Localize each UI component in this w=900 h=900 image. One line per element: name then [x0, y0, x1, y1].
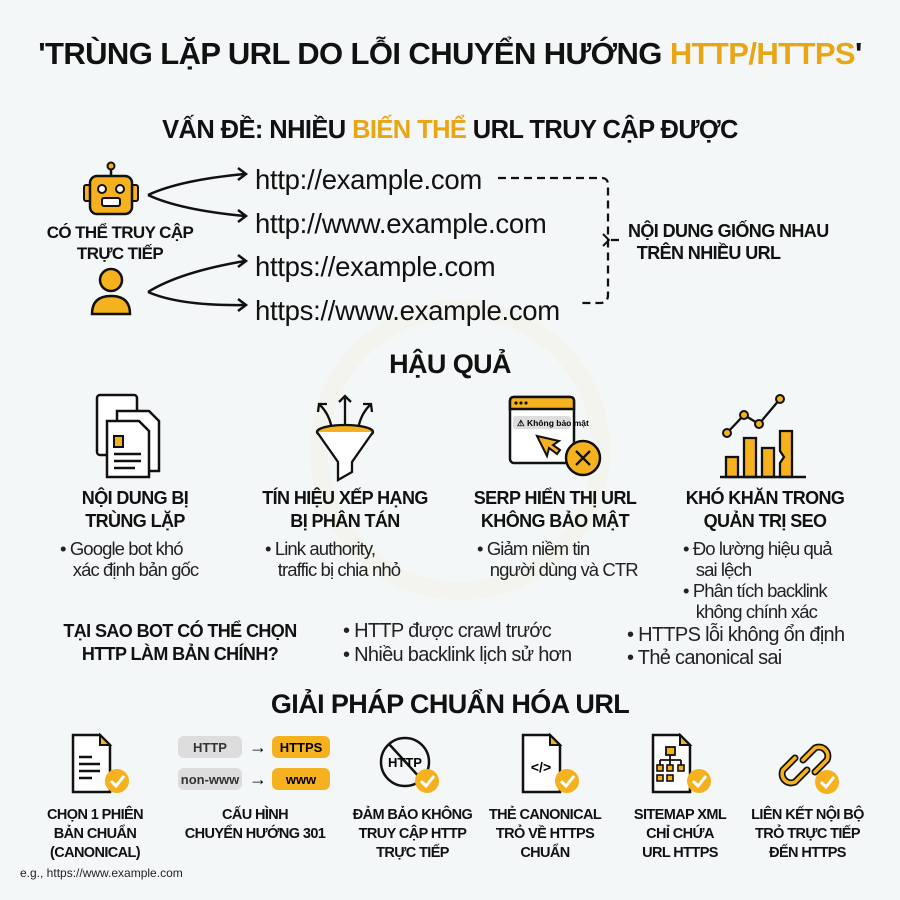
label: CHỈ CHỨA	[646, 826, 714, 842]
label	[47, 806, 143, 861]
solution 1	[47, 732, 143, 861]
heading: consequences: HẬU QUẢ	[389, 349, 511, 379]
icon: redirect boxes: →	[249, 769, 267, 789]
icon: no http	[380, 736, 439, 793]
url list: https://example.com	[255, 251, 495, 282]
solution 2	[178, 736, 330, 842]
label: (CANONICAL)	[50, 845, 140, 861]
icon: redirect boxes: www	[285, 772, 317, 787]
title: NỘI DUNG BỊ	[82, 488, 188, 508]
label: direct access	[47, 223, 194, 263]
label: direct access: TRỰC TIẾP	[77, 244, 163, 263]
icon: chart	[720, 394, 806, 478]
bullets: • Giảm niềm tin	[477, 538, 589, 559]
bullets: • Phân tích backlink	[683, 580, 827, 601]
bullets: sai lệch	[696, 559, 751, 580]
bullets: • Google bot khó	[60, 538, 183, 559]
label: CHỌN 1 PHIÊN	[47, 807, 143, 823]
title: TÍN HIỆU XẾP HẠNG	[262, 488, 428, 508]
title	[82, 487, 188, 531]
reasons list 2: • Thẻ canonical sai	[627, 647, 782, 669]
label: CHUYỂN HƯỚNG 301	[185, 826, 325, 842]
label	[610, 806, 750, 863]
label: TRỰC TIẾP	[376, 845, 449, 861]
reasons list 1	[343, 620, 571, 666]
bullets	[683, 538, 833, 622]
subheading: problem: VẤN ĐỀ: NHIỀU BIẾN THỂ URL TRUY CẬP ĐƯỢC	[162, 116, 738, 144]
url list: https://www.example.com	[255, 294, 560, 326]
reasons list 1: • Nhiều backlink lịch sử hơn	[343, 644, 571, 666]
bullets	[265, 538, 400, 580]
title: KHÓ KHĂN TRONG	[686, 488, 844, 508]
solution 4	[489, 732, 602, 861]
label: ĐẢM BẢO KHÔNG	[353, 807, 472, 823]
label: BẢN CHUẨN	[54, 826, 136, 842]
title	[686, 487, 844, 531]
label: ĐẾN HTTPS	[769, 845, 846, 861]
icon: redirect boxes: non-www	[181, 772, 240, 787]
icon: redirect boxes	[178, 736, 330, 790]
label: same content: TRÊN NHIỀU URL	[637, 243, 780, 263]
url list: http://example.com	[255, 164, 482, 195]
panel: ranking signals	[262, 394, 428, 580]
title: QUẢN TRỊ SEO	[704, 511, 826, 531]
solution 3	[352, 736, 472, 861]
label: THẺ CANONICAL	[489, 807, 601, 823]
reasons list 2	[627, 623, 844, 669]
label: direct access: CÓ THỂ TRUY CẬP	[47, 223, 193, 242]
dashed bracket	[498, 176, 619, 304]
title: BỊ PHÂN TÁN	[290, 511, 400, 531]
url list	[255, 164, 560, 326]
icon: code doc: </>	[531, 759, 551, 775]
icon: funnel	[316, 394, 374, 482]
question: why bot picks http: HTTP LÀM BẢN CHÍNH?	[82, 644, 278, 664]
label: TRỎ TRỰC TIẾP	[755, 826, 860, 842]
bullets	[477, 538, 638, 580]
label: same content: NỘI DUNG GIỐNG NHAU	[628, 221, 829, 241]
title: 'TRÙNG LẶP URL DO LỖI CHUYỂN HƯỚNG HTTP/HTTPS'	[38, 36, 862, 71]
question: why bot picks http	[63, 620, 297, 664]
bullets: xác định bản gốc	[73, 559, 198, 580]
bullets: • Link authority,	[265, 538, 375, 559]
label: TRUY CẬP HTTP	[359, 826, 466, 842]
solution 5	[610, 730, 750, 865]
icon: link	[777, 734, 843, 798]
icon: code doc	[522, 732, 579, 794]
question: why bot picks http: TẠI SAO BOT CÓ THỂ CHỌN	[63, 621, 297, 641]
label: TRỎ VỀ HTTPS	[496, 826, 594, 842]
panel: duplicate content	[60, 394, 199, 580]
reasons list 1: • HTTP được crawl trước	[343, 620, 551, 642]
bullets	[60, 538, 199, 580]
icon: browser warning: ⚠ Không bảo mật	[517, 418, 589, 428]
title: SERP HIỂN THỊ URL	[474, 488, 636, 508]
watermark	[310, 300, 610, 600]
label: SITEMAP XML	[634, 807, 726, 823]
label	[352, 806, 472, 861]
label: CẤU HÌNH	[222, 807, 288, 823]
panel: insecure serp	[474, 396, 638, 580]
icon: redirect boxes: HTTPS	[280, 740, 323, 755]
panel: seo management	[683, 394, 844, 622]
icon: sitemap doc	[650, 732, 714, 796]
label: CHUẨN	[520, 845, 570, 861]
title: TRÙNG LẶP	[85, 511, 185, 531]
solution 6	[735, 730, 880, 865]
label	[185, 806, 326, 842]
icon: documents	[96, 394, 160, 478]
footnote: e.g., https://www.example.com	[20, 866, 183, 880]
title: KHÔNG BẢO MẬT	[481, 511, 629, 531]
bullets: không chính xác	[696, 601, 817, 622]
label: same content	[628, 220, 829, 263]
label: URL HTTPS	[642, 845, 718, 861]
label: LIÊN KẾT NỘI BỘ	[751, 807, 864, 823]
icon: user	[90, 268, 132, 316]
icon: browser warning	[508, 396, 602, 476]
bullets: traffic bị chia nhỏ	[278, 559, 400, 580]
icon: no http: HTTP	[388, 755, 422, 770]
icon: redirect boxes: HTTP	[193, 740, 227, 755]
icon: robot	[83, 162, 139, 216]
heading: solutions: GIẢI PHÁP CHUẨN HÓA URL	[271, 689, 629, 719]
reasons list 2: • HTTPS lỗi không ổn định	[627, 624, 844, 646]
bullets: người dùng và CTR	[490, 559, 638, 580]
label	[489, 806, 602, 861]
label	[735, 806, 880, 863]
icon: redirect boxes: →	[249, 737, 267, 757]
url list: http://www.example.com	[255, 208, 546, 238]
title	[262, 487, 428, 531]
bullets: • Đo lường hiệu quả	[683, 538, 832, 559]
arrows to urls	[147, 167, 248, 312]
title	[474, 488, 636, 531]
icon: doc check	[72, 732, 129, 794]
